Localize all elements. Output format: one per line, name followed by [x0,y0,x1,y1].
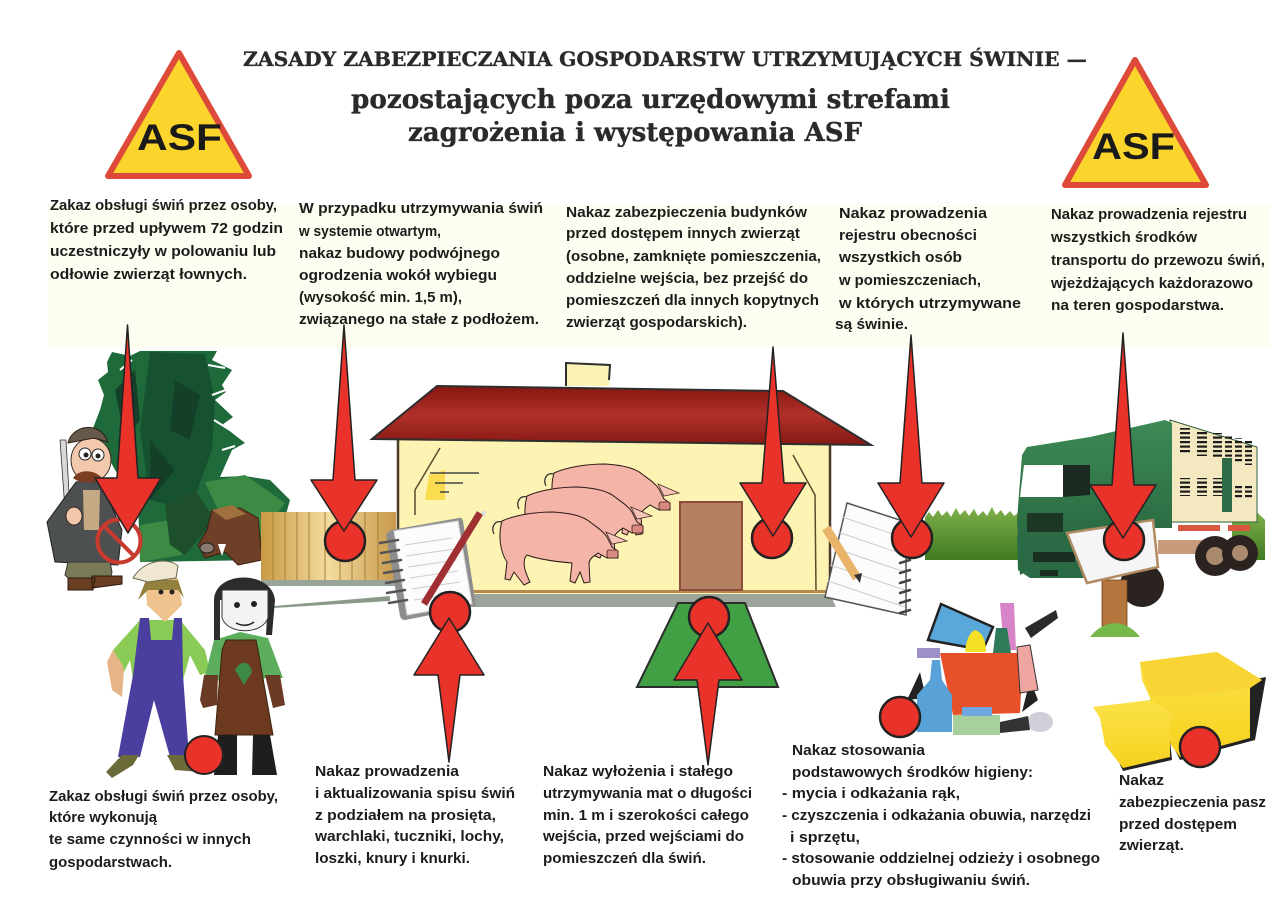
title [243,46,1087,148]
text block: securing buildings: Nakaz zabezpieczenia budynków [566,204,807,221]
text block: disinfection mats: Nakaz wyłożenia i stałego [543,763,733,780]
grass [925,507,1265,560]
icon: ASF warning triangle right [1065,60,1206,185]
text block: securing buildings: przed dostępem innych zwierząt [566,225,800,242]
icon: cleaning supplies [907,603,1058,735]
red arrow: fence [311,325,377,531]
icon: sign post [1067,520,1158,637]
text block: same work elsewhere ban: gospodarstwach. [49,854,172,871]
icon: ASF warning triangle left [108,53,249,176]
illustration: hunter [47,427,122,590]
text block: feed protection [1119,772,1266,854]
illustration: three pigs [493,464,679,585]
title: ZASADY ZABEZPIECZANIA GOSPODARSTW UTRZYMUJĄCYCH ŚWINIE — [243,46,1087,71]
text block: pig inventory [314,763,515,867]
text block: hygiene: - stosowanie oddzielnej odzieży i osobnego [782,850,1100,867]
text block: double fence [298,200,543,328]
text block: feed protection: zwierząt. [1119,837,1184,854]
marker: farm workers [185,736,223,774]
icon: notebook with pencil left [380,510,487,620]
icon: ASF warning triangle right: ASF [1092,126,1175,167]
text block: presence register: Nakaz prowadzenia [839,205,988,222]
text block: same work elsewhere ban [49,788,278,871]
text block: securing buildings [566,204,821,331]
text block: hygiene [782,742,1100,889]
text block: transport register: Nakaz prowadzenia rejestru [1051,206,1247,223]
callout marker: fence [311,325,377,561]
text block: double fence: w systemie otwartym, [298,223,441,240]
red arrow: disinfection mat [674,623,742,765]
illustration: livestock truck [1017,420,1258,607]
text block: same work elsewhere ban: te same czynności w innych [49,831,251,848]
text block: presence register: rejestru obecności [839,227,977,244]
illustration: pig house [372,362,871,607]
callout marker: transport register [1090,333,1156,560]
text block: hygiene: podstawowych środków higieny: [792,764,1033,781]
text block: disinfection mats: pomieszczeń dla świń. [543,850,706,867]
text block: hygiene: - czyszczenia i odkażania obuwia, narzędzi [782,807,1091,824]
text block: pig inventory: z podziałem na prosięta, [315,807,496,824]
callout marker: presence register [878,335,944,558]
text block: pig inventory: warchlaki, tuczniki, lochy, [314,828,504,845]
red arrow: buildings [740,347,806,536]
text block: same work elsewhere ban: Zakaz obsługi świń przez osoby, [49,788,278,805]
text block: pig inventory: loszki, knury i knurki. [315,850,470,867]
text block: presence register: są świnie. [835,316,908,333]
illustration: farmer [106,561,224,778]
callout marker: disinfection mat [674,597,742,765]
text block: hunting ban: które przed upływem 72 godzin [50,220,283,237]
text block: transport register [1050,206,1265,314]
text block: hunting ban [50,197,283,283]
text block: same work elsewhere ban: które wykonują [49,809,158,826]
text block: hygiene: obuwia przy obsługiwaniu świń. [792,872,1030,889]
icon: ASF warning triangle left: ASF [137,117,222,158]
text block: feed protection: przed dostępem [1119,816,1237,833]
text block: transport register: na teren gospodarstwa. [1051,297,1224,314]
title: zagrożenia i występowania ASF [408,118,863,148]
text block: presence register: w których utrzymywane [838,295,1021,312]
text block: hunting ban: odłowie zwierząt łownych. [50,266,247,283]
text block: hygiene: Nakaz stosowania [792,742,926,759]
text block: double fence: nakaz budowy podwójnego [299,245,500,262]
text block: disinfection mats: wejścia, przed wejściami do [542,828,744,845]
text block: pig inventory: Nakaz prowadzenia [315,763,460,780]
text block: securing buildings: pomieszczeń dla innych kopytnych [566,292,819,309]
icon: yellow feed bins [1093,652,1266,771]
cream text band [48,205,1270,348]
text block: feed protection: Nakaz [1119,772,1164,789]
illustration: wooden fence [261,512,396,608]
illustration: forest [93,351,290,562]
callout marker: buildings [740,347,806,558]
title: pozostających poza urzędowymi strefami [351,85,950,115]
door [680,502,742,590]
red arrow: presence register [878,335,944,537]
red arrow: hunting ban [95,325,161,533]
text block: hunting ban: uczestniczyły w polowaniu lub [50,243,276,260]
text block: disinfection mats: min. 1 m i szerokości całego [543,807,749,824]
text block: pig inventory: i aktualizowania spisu świń [315,785,515,802]
text block: disinfection mats [542,763,752,867]
text block: hygiene: i sprzętu, [790,829,860,846]
text block: disinfection mats: utrzymywania mat o długości [543,785,752,802]
callout marker: pig inventory [414,592,484,762]
text block: presence register [835,205,1021,333]
red arrow: pig inventory [414,618,484,762]
icon: notebook with pencil right [825,503,910,615]
marker: hygiene [880,697,920,737]
text block: securing buildings: oddzielne wejścia, bez przejść do [566,270,808,287]
illustration: woman with apron [200,578,285,775]
text block: feed protection: zabezpieczenia pasz [1119,794,1266,811]
marker: feed [1180,727,1220,767]
text block: transport register: wjeżdżających każdorazowo [1050,275,1253,292]
text block: double fence: W przypadku utrzymywania świń [299,200,543,217]
text block: securing buildings: zwierząt gospodarskich). [566,314,747,331]
text block: double fence: ogrodzenia wokół wybiegu [299,267,497,284]
text block: hunting ban: Zakaz obsługi świń przez osoby, [50,197,277,214]
text block: transport register: wszystkich środków [1050,229,1197,246]
text block: transport register: transportu do przewozu świń, [1051,252,1265,269]
text block: double fence: związanego na stałe z podłożem. [299,311,539,328]
text block: presence register: w pomieszczeniach, [838,272,981,289]
red arrow: transport register [1090,333,1156,538]
text block: presence register: wszystkich osób [838,249,962,266]
text block: hygiene: - mycia i odkażania rąk, [782,785,960,802]
text block: double fence: (wysokość min. 1,5 m), [299,289,462,306]
text block: securing buildings: (osobne, zamknięte pomieszczenia, [566,248,821,265]
icon: prohibition sign [98,520,140,562]
illustration: wild boar [198,505,262,565]
green disinfection mat [637,603,778,687]
